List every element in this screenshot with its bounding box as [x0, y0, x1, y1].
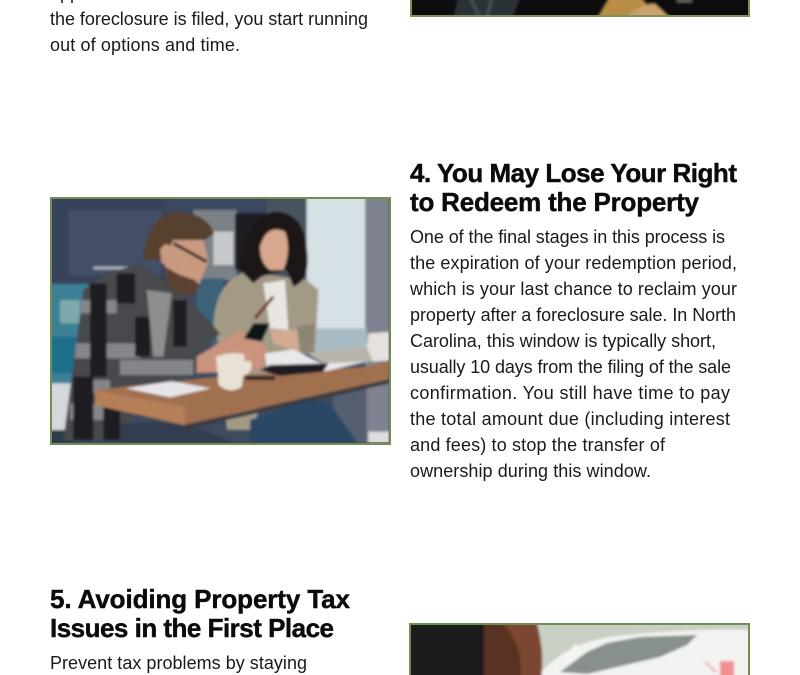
text block: section 4 body: [409, 227, 737, 481]
man shirt: [63, 263, 220, 440]
text block: section 4 body: confirmation. You still have time to pay: [410, 383, 730, 403]
text block: end of section 3: the foreclosure is filed, you start running: [50, 9, 368, 29]
text block: section 4 body: One of the final stages in this process is: [410, 227, 725, 247]
notebook: [126, 381, 211, 397]
heading: section 4: 4. You May Lose Your Right: [410, 158, 737, 188]
woman: [213, 272, 318, 430]
heading: section 5: 5. Avoiding Property Tax: [50, 584, 351, 614]
heading: section 4: to Redeem the Property: [410, 187, 700, 217]
text block: end of section 3: out of options and time.: [50, 35, 240, 55]
text block: section 4 body: the total amount due (including interest: [410, 409, 730, 429]
text block: end of section 3: [50, 0, 368, 55]
text block: section 4 body: property after a foreclosure sale. In North: [410, 305, 736, 325]
image: couple reviewing papers at a table: [47, 193, 395, 447]
table: [95, 360, 393, 425]
text block: section 4 body: and fees) to stop the transfer of: [410, 435, 666, 455]
teal bench: [47, 284, 89, 384]
text block: section 4 body: the expiration of your redemption period,: [410, 253, 737, 273]
text block: section 4 body: which is your last chance to reclaim your: [409, 279, 737, 299]
heading: section 5: [50, 584, 351, 643]
kitchen background: [66, 199, 242, 286]
image: section 3 photo bottom edge: [410, 0, 750, 17]
text block: section 4 body: Carolina, this window is typically short,: [410, 331, 716, 351]
hands and phone: [197, 330, 267, 373]
text block: section 4 body: usually 10 days from the filing of the sale: [410, 357, 731, 377]
mugs: [216, 353, 252, 390]
man head: [143, 212, 214, 260]
jeans: [248, 400, 358, 442]
text block: section 5 body: Prevent tax problems by staying: [50, 653, 307, 673]
text block: section 4 body: ownership during this window.: [410, 461, 651, 481]
heading: section 4: [410, 158, 737, 217]
papers: [265, 349, 368, 372]
heading: section 5: Issues in the First Place: [50, 613, 334, 643]
image: section 5 photo top edge: [405, 620, 755, 675]
